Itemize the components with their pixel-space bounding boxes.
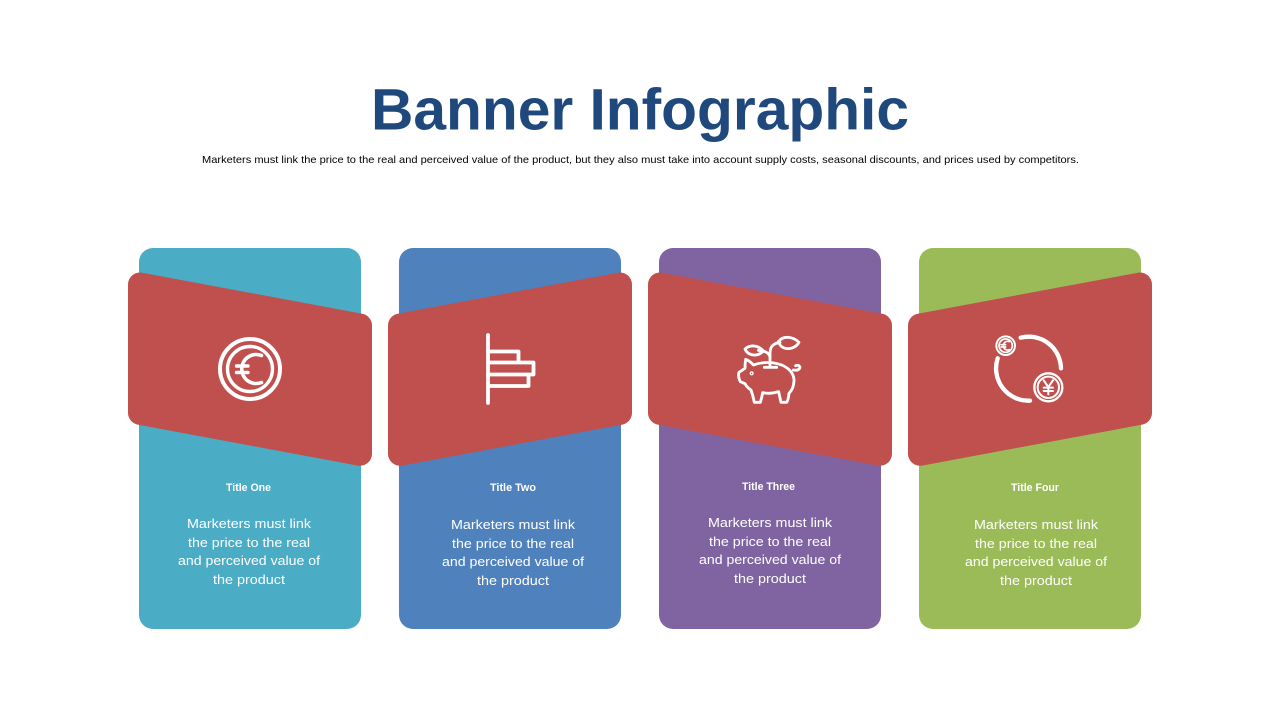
panel: card three bbox=[648, 248, 892, 629]
card three body text: the product bbox=[734, 571, 806, 586]
card two body text: the product bbox=[477, 573, 549, 588]
panel: card one bbox=[128, 248, 372, 629]
panel: card four bbox=[908, 248, 1152, 629]
card one background bbox=[139, 248, 361, 629]
card four background bbox=[919, 248, 1141, 629]
card one body text: the product bbox=[213, 572, 285, 587]
icon: currency exchange bbox=[996, 336, 1062, 401]
card two body text bbox=[442, 517, 584, 588]
card three body text: and perceived value of bbox=[699, 552, 841, 567]
subtitle text: Marketers must link the price to the real and perceived value of the product, but they also must take into account supply costs, seasonal discounts, and prices used by competitors. bbox=[202, 154, 1079, 166]
card two body text: Marketers must link bbox=[451, 517, 576, 532]
panel: card two bbox=[388, 248, 632, 629]
card two body text: and perceived value of bbox=[442, 554, 584, 569]
card three body text bbox=[699, 515, 841, 586]
card two banner bbox=[388, 272, 632, 466]
card one heading: Title One bbox=[226, 482, 271, 494]
icon: euro coin bbox=[220, 339, 280, 399]
card three heading: Title Three bbox=[742, 481, 795, 493]
card one body text: the price to the real bbox=[188, 535, 310, 550]
icon: horizontal bar chart bbox=[488, 335, 534, 403]
title: Banner Infographic bbox=[371, 78, 909, 142]
card two background bbox=[399, 248, 621, 629]
card three banner bbox=[648, 272, 892, 466]
card four body text bbox=[965, 517, 1107, 588]
card one body text: and perceived value of bbox=[178, 553, 320, 568]
card two body text: the price to the real bbox=[452, 536, 574, 551]
card two heading: Title Two bbox=[490, 482, 536, 494]
card four banner bbox=[908, 272, 1152, 466]
card three body text: the price to the real bbox=[709, 534, 831, 549]
card three background bbox=[659, 248, 881, 629]
card four body text: Marketers must link bbox=[974, 517, 1099, 532]
card three body text: Marketers must link bbox=[708, 515, 833, 530]
card four body text: the price to the real bbox=[975, 536, 1097, 551]
card one body text: Marketers must link bbox=[187, 516, 312, 531]
card one body text bbox=[178, 516, 320, 587]
card four body text: and perceived value of bbox=[965, 554, 1107, 569]
icon: piggy bank with sprout bbox=[739, 337, 800, 402]
card four body text: the product bbox=[1000, 573, 1072, 588]
card one banner bbox=[128, 272, 372, 466]
card four heading: Title Four bbox=[1011, 482, 1060, 494]
